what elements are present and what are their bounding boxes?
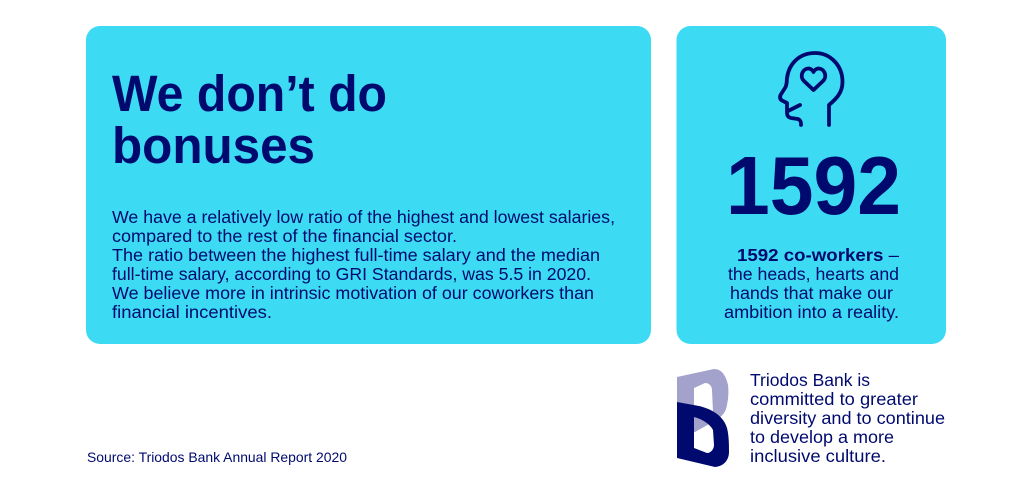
caption: the heads, hearts and [728, 264, 899, 284]
body text: financial incentives. [112, 302, 272, 322]
commitment text: diversity and to continue [750, 408, 945, 428]
logo: Triodos B [677, 369, 729, 467]
body text [112, 207, 615, 322]
big number: 1592 [726, 139, 901, 232]
heading: bonuses [112, 117, 315, 174]
body text: We believe more in intrinsic motivation of our coworkers than [112, 283, 594, 303]
commitment text: inclusive culture. [750, 446, 886, 466]
heading [112, 65, 387, 174]
body text: We have a relatively low ratio of the highest and lowest salaries, [112, 207, 615, 227]
caption: hands that make our [730, 283, 893, 303]
icon: head with heart [780, 53, 842, 125]
panel: we don't do bonuses [86, 26, 651, 344]
source: Source: Triodos Bank Annual Report 2020 [87, 449, 347, 465]
commitment text: to develop a more [750, 427, 894, 447]
caption [724, 245, 899, 322]
heading: We don’t do [112, 65, 387, 122]
commitment text [750, 370, 945, 466]
body text: compared to the rest of the financial sector. [112, 226, 457, 246]
body text: The ratio between the highest full-time salary and the median [112, 245, 600, 265]
caption: 1592 co-workers – [737, 245, 899, 265]
body text: full-time salary, according to GRI Standards, was 5.5 in 2020. [112, 264, 591, 284]
commitment text: committed to greater [750, 389, 918, 409]
panel: co-workers [676, 26, 946, 344]
commitment text: Triodos Bank is [750, 370, 870, 390]
caption: ambition into a reality. [724, 302, 899, 322]
